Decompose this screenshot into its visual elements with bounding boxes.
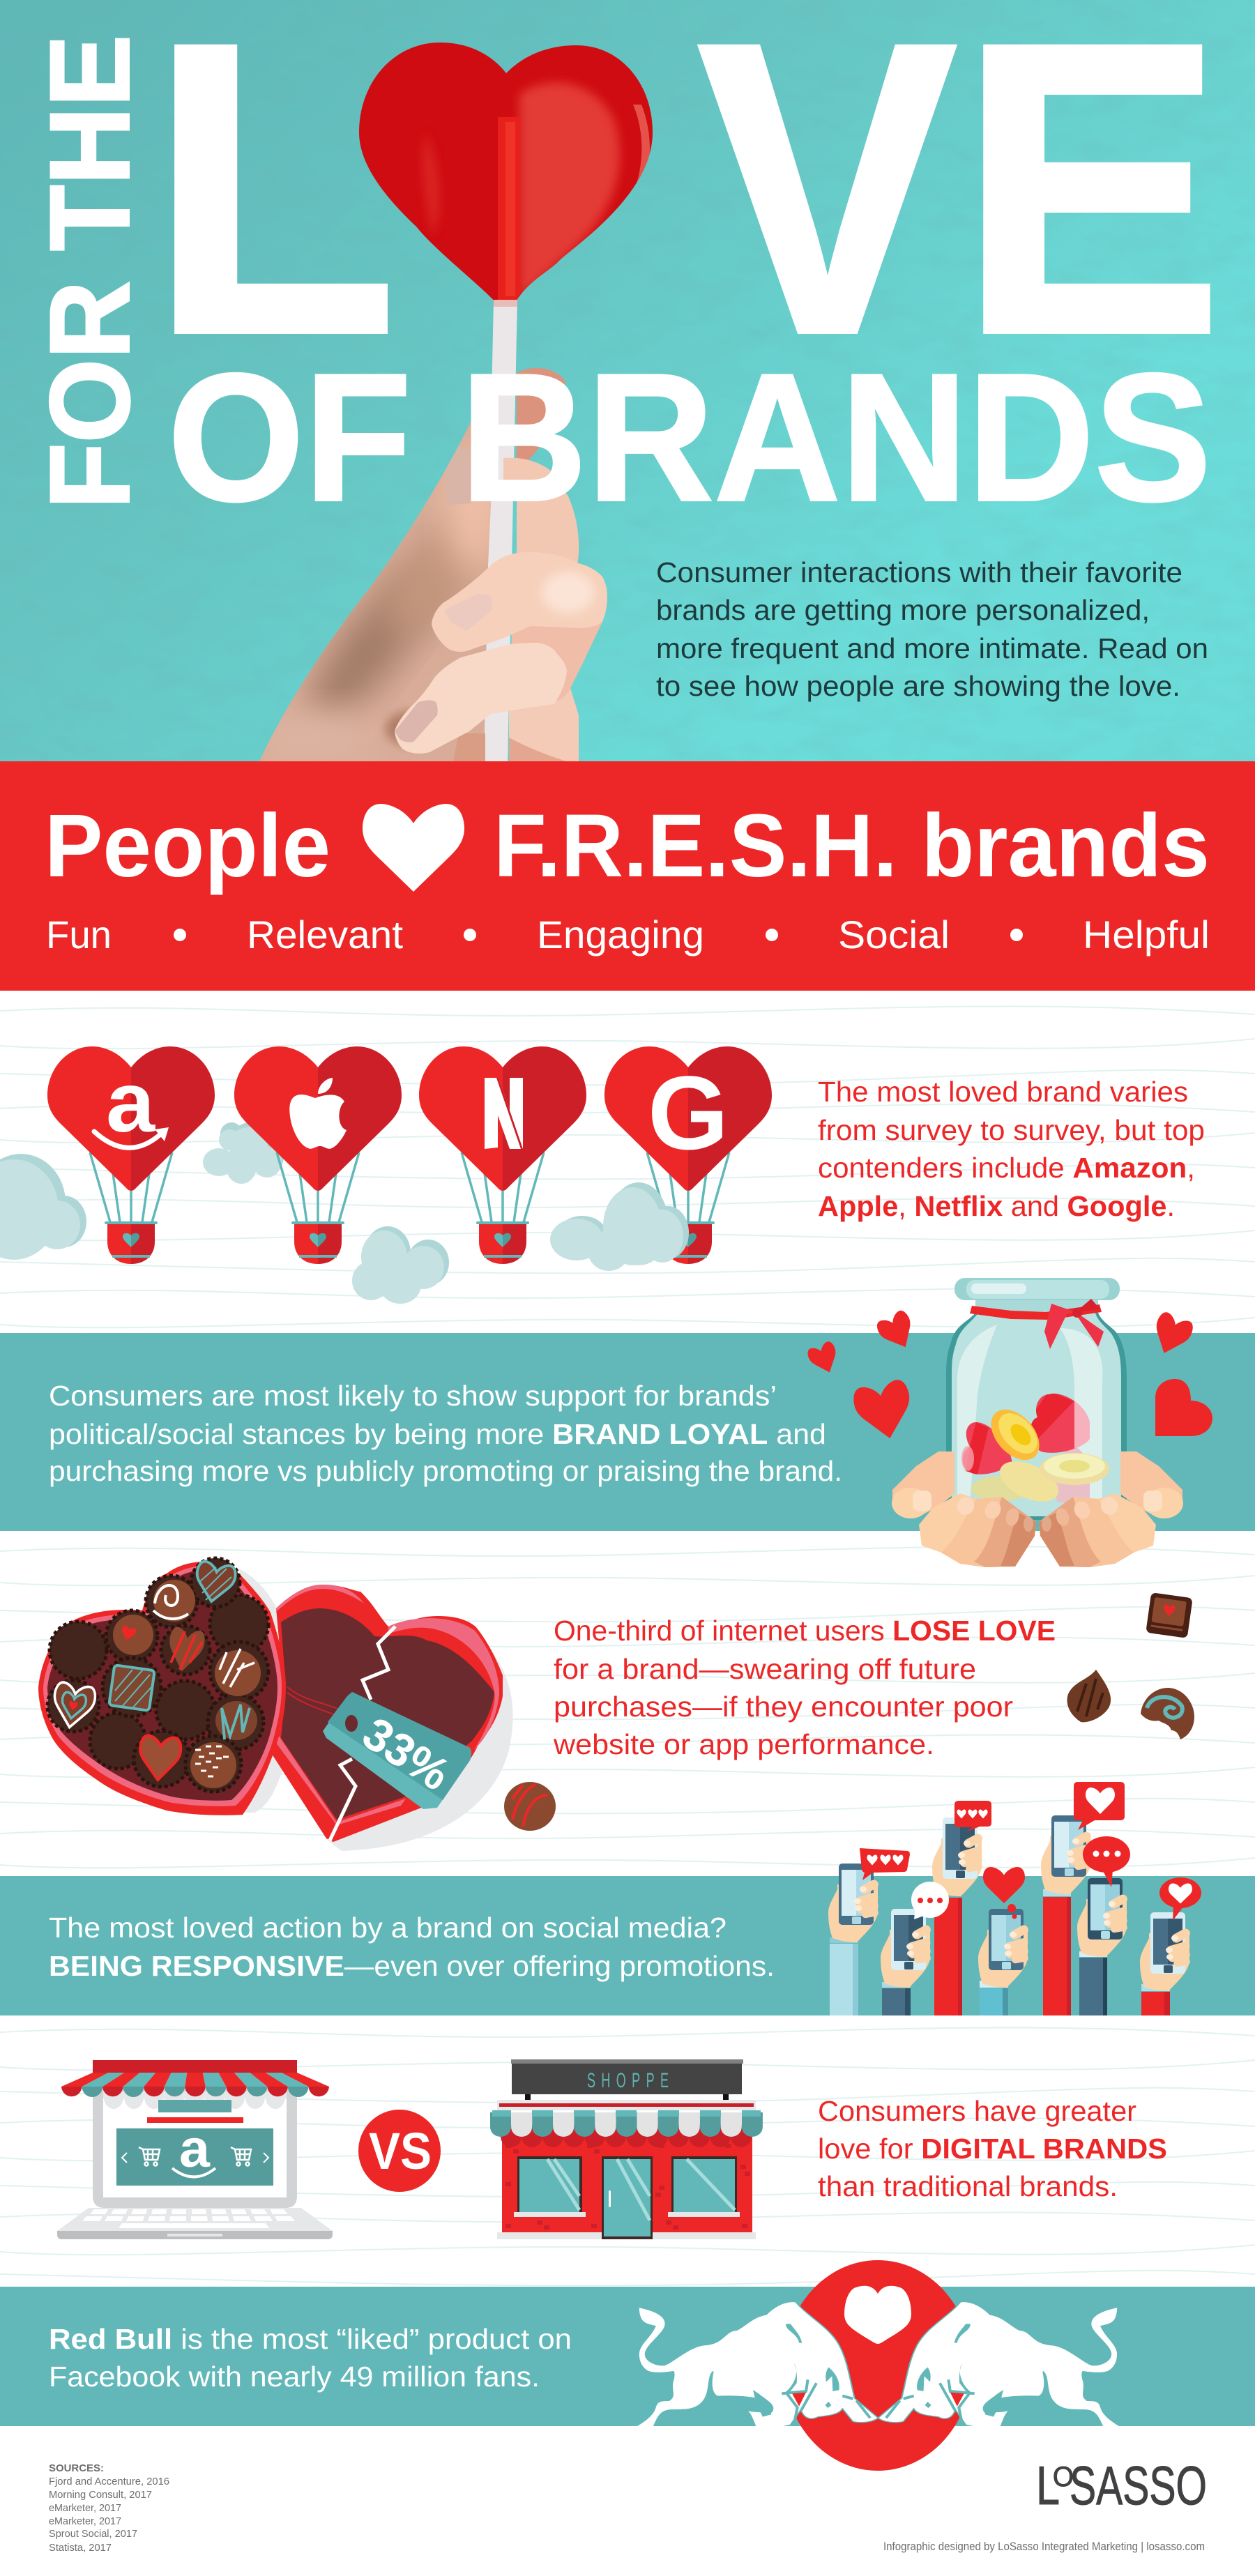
fresh word row: Engaging: [537, 913, 704, 957]
intro paragraph: [656, 556, 1208, 702]
panel: red bull: [0, 2260, 1255, 2471]
laptop awning: [61, 2060, 329, 2097]
logo: losasso: SASSO: [1070, 2455, 1207, 2516]
shop windows and door: [497, 2156, 756, 2239]
intro paragraph: brands are getting more personalized,: [656, 594, 1150, 626]
red sun circle: [784, 2260, 972, 2471]
text: lose love: website or app performance.: [553, 1728, 934, 1760]
title: of brands: OF BRANDS: [167, 336, 1212, 540]
panel: brand loyal: [0, 1278, 1255, 1567]
balloon: amazon: a: [106, 1055, 155, 1150]
text: lose love: One-third of internet users LOSE LOVE: [554, 1615, 1056, 1647]
text: being responsive: [49, 1912, 775, 1982]
text: red bull: [49, 2323, 572, 2393]
bubble: circle heart: [1159, 1877, 1201, 1921]
text: most loved brand: [818, 1076, 1205, 1222]
icon: shopping carts: [122, 2147, 268, 2165]
footer sources: eMarketer, 2017: [49, 2515, 121, 2527]
cloud: between first balloons: [203, 1122, 284, 1184]
text: being responsive: BEING RESPONSIVE —even over offering promotions.: [49, 1950, 775, 1982]
hand with phone 1: [828, 1864, 880, 2015]
cloud: lower middle: [352, 1226, 449, 1304]
intro paragraph: to see how people are showing the love.: [656, 670, 1180, 702]
amazon logo on laptop: a: [179, 2119, 211, 2179]
shop awning: [490, 2110, 763, 2137]
footer sources: Sprout Social, 2017: [49, 2528, 137, 2540]
intro paragraph: Consumer interactions with their favorite: [656, 556, 1182, 588]
text: digital brands: [818, 2095, 1167, 2202]
fresh word row: [46, 913, 1210, 957]
chat bubbles: [860, 1782, 1201, 1921]
panel: lose love: [38, 1558, 1194, 1851]
bubble: floating heart: [983, 1867, 1025, 1919]
footer credit: Infographic designed by LoSasso Integrated Marketing | losasso.com: [883, 2540, 1205, 2553]
text: lose love: for a brand—swearing off future: [554, 1653, 976, 1685]
balloon: google: [604, 1046, 772, 1264]
box lid, right half: [271, 1585, 503, 1842]
box base, left half: [38, 1562, 286, 1815]
balloon: google: G: [648, 1054, 729, 1171]
laptop storefront: [57, 2060, 333, 2239]
hand with phone 4: [978, 1909, 1030, 2015]
heart lollipop: [359, 43, 653, 307]
intro paragraph: more frequent and more intimate. Read on: [656, 632, 1208, 664]
icon: vs badge: VS: [369, 2122, 432, 2180]
balloon: apple: [234, 1046, 402, 1264]
bubble: red dots: [1083, 1836, 1130, 1887]
panel: digital versus traditional: [57, 2059, 1167, 2239]
text: brand loyal: political/social stances by being more BRAND LOYAL and: [49, 1418, 826, 1450]
title: for the: FOR THE: [26, 35, 153, 509]
hand with phone 5: [1041, 1815, 1093, 2015]
icon: white heart in sun: [844, 2286, 911, 2344]
heading: people: People: [45, 796, 330, 896]
icon: square chocolate: [1146, 1592, 1193, 1638]
balloon: netflix: [419, 1046, 586, 1264]
title: love: [149, 0, 1224, 420]
footer sources: Fjord and Accenture, 2016: [49, 2476, 169, 2487]
text: brand loyal: Consumers are most likely to show support for brands’: [49, 1380, 777, 1412]
hand holding the lollipop: [251, 368, 607, 767]
footer sources: [49, 2462, 169, 2554]
price tag 33 percent: [323, 1692, 471, 1809]
jar contents: [961, 1391, 1109, 1510]
hand with phone 3: [932, 1817, 984, 2015]
open heart box: [38, 1558, 513, 1851]
fresh word row: Relevant: [247, 913, 403, 957]
text: brand loyal: purchasing more vs publicly promoting or praising the brand.: [49, 1455, 842, 1487]
logo: losasso: L: [1036, 2455, 1060, 2516]
logo: losasso: [1036, 2455, 1207, 2516]
shop bricks: [505, 2144, 750, 2230]
bubble: large heart: [1074, 1782, 1125, 1830]
charging bulls: [634, 2301, 1122, 2428]
text: lose love: [553, 1615, 1056, 1760]
phones in raised hands: [828, 1815, 1192, 2015]
ribbon string: [287, 1687, 352, 1725]
text: most loved brand: The most loved brand varies: [818, 1076, 1188, 1108]
text: being responsive: The most loved action by a brand on social media?: [49, 1912, 727, 1944]
text: brand loyal: [49, 1380, 842, 1487]
text: most loved brand: contenders include Amazon,: [818, 1152, 1195, 1184]
text: red bull: Facebook with nearly 49 million fans.: [49, 2361, 540, 2393]
hand with phone 7: [1140, 1912, 1192, 2015]
panel: people love fresh brands: [0, 761, 1255, 991]
bubble: white dots: [911, 1882, 949, 1919]
bubble: three hearts left: [860, 1848, 910, 1880]
shop sign text: SHOPPE: [587, 2070, 674, 2092]
panel: being responsive: [0, 1782, 1255, 2015]
panel: most loved brand balloons: [0, 1046, 1205, 1304]
footer sources: Morning Consult, 2017: [49, 2489, 152, 2501]
footer sources: Statista, 2017: [49, 2542, 112, 2554]
icon: striped drop chocolate: [1067, 1670, 1111, 1722]
balloon: amazon: [47, 1046, 215, 1264]
text: lose love: purchases—if they encounter poor: [554, 1691, 1013, 1723]
cloud: far left: [0, 1154, 86, 1260]
background waves: [0, 1006, 1255, 2285]
fresh word row: Fun: [46, 913, 112, 957]
bubble: three hearts top: [954, 1801, 991, 1832]
heading: fresh brands: F.R.E.S.H. brands: [494, 796, 1210, 896]
traditional shop: [490, 2059, 763, 2239]
jar with hearts and coins: [892, 1278, 1183, 1567]
footer sources: eMarketer, 2017: [49, 2502, 121, 2514]
text: digital brands: Consumers have greater: [818, 2095, 1136, 2127]
cloud: over last balloon: [550, 1182, 689, 1271]
hand with phone 6: [1077, 1878, 1129, 2015]
icon: white heart: [363, 804, 464, 892]
chocolates inside box: [47, 1558, 268, 1792]
footer sources: SOURCES:: [49, 2462, 104, 2474]
price tag 33 percent: 33%: [354, 1707, 459, 1800]
laptop keyboard: [57, 2208, 333, 2239]
text: most loved brand: from survey to survey, but top: [818, 1114, 1205, 1146]
fresh word row: Helpful: [1083, 913, 1210, 957]
fresh word row: Social: [838, 913, 950, 957]
lollipop stick: [484, 300, 517, 761]
icon: loose chocolate with red drizzle: [504, 1782, 556, 1831]
hero panel: [0, 0, 1255, 767]
text: most loved brand: Apple, Netflix and Google.: [818, 1190, 1175, 1222]
text: digital brands: love for DIGITAL BRANDS: [818, 2133, 1167, 2165]
text: digital brands: than traditional brands.: [818, 2170, 1118, 2202]
icon: floating hearts: [806, 1309, 1212, 1444]
amazon logo on laptop: [172, 2119, 215, 2179]
icon: vs badge: [358, 2110, 441, 2192]
truffle details: [50, 1560, 261, 1788]
hand with phone 2: [881, 1909, 932, 2015]
text: red bull: Red Bull is the most “liked” product on: [49, 2323, 572, 2355]
logo: losasso: O: [1053, 2462, 1074, 2492]
hands cradling jar: [892, 1451, 1183, 1567]
ribbon and bow: [970, 1299, 1104, 1349]
icon: bitten teal chocolate: [1141, 1688, 1194, 1739]
